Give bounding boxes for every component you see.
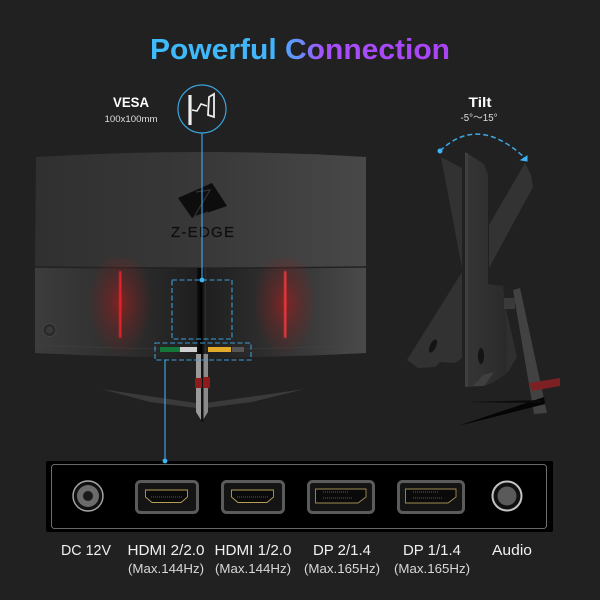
Z-EDGE logo bbox=[171, 183, 234, 241]
upright position bbox=[465, 152, 507, 387]
port labels: (Max.165Hz) bbox=[304, 562, 380, 576]
icon: DC jack bbox=[73, 481, 103, 511]
stand bbox=[101, 268, 305, 422]
tilt label: -5°〜15° bbox=[460, 113, 498, 124]
icon: tilt arc arrow bbox=[438, 134, 527, 161]
port labels: Audio bbox=[492, 542, 532, 559]
tilted forward position bbox=[489, 163, 533, 268]
icon: audio jack bbox=[492, 482, 522, 510]
tilt label: Tilt bbox=[468, 95, 492, 110]
port labels: (Max.165Hz) bbox=[394, 562, 470, 576]
icon: DP 2 port bbox=[308, 482, 374, 512]
tilted back position bbox=[407, 157, 462, 368]
icon: HDMI 2 port bbox=[136, 482, 198, 512]
port labels: (Max.144Hz) bbox=[128, 562, 204, 576]
monitor upper housing bbox=[35, 152, 366, 268]
port labels: HDMI 2/2.0 bbox=[128, 542, 204, 559]
icon: HDMI 1 port bbox=[222, 482, 284, 512]
VESA label: 100x100mm bbox=[104, 114, 158, 125]
infographic canvas bbox=[35, 38, 560, 576]
VESA label: VESA bbox=[113, 95, 149, 110]
port labels: DP 1/1.4 bbox=[403, 542, 461, 559]
VESA callout with dashed highlight bbox=[172, 85, 232, 339]
port labels: DC 12V bbox=[61, 542, 111, 559]
icon: VESA mount bbox=[190, 94, 214, 125]
port strip on monitor bbox=[160, 347, 244, 352]
Z-EDGE logo: Z-EDGE bbox=[171, 224, 234, 241]
port labels: HDMI 1/2.0 bbox=[214, 542, 292, 559]
port panel bbox=[46, 459, 553, 532]
monitor side view tilted bbox=[407, 152, 560, 426]
title: Powerful Connection bbox=[150, 34, 450, 66]
icon: DP 1 port bbox=[398, 482, 464, 512]
VESA label bbox=[104, 95, 158, 125]
monitor lower housing with red light strips bbox=[35, 249, 366, 358]
port labels: DP 2/1.4 bbox=[313, 542, 371, 559]
tilt label bbox=[460, 95, 498, 124]
port labels: (Max.144Hz) bbox=[215, 562, 291, 576]
ports callout with dashed highlight bbox=[155, 343, 251, 461]
port labels bbox=[61, 542, 532, 576]
monitor rear bbox=[35, 152, 366, 358]
side stand bbox=[458, 288, 560, 426]
